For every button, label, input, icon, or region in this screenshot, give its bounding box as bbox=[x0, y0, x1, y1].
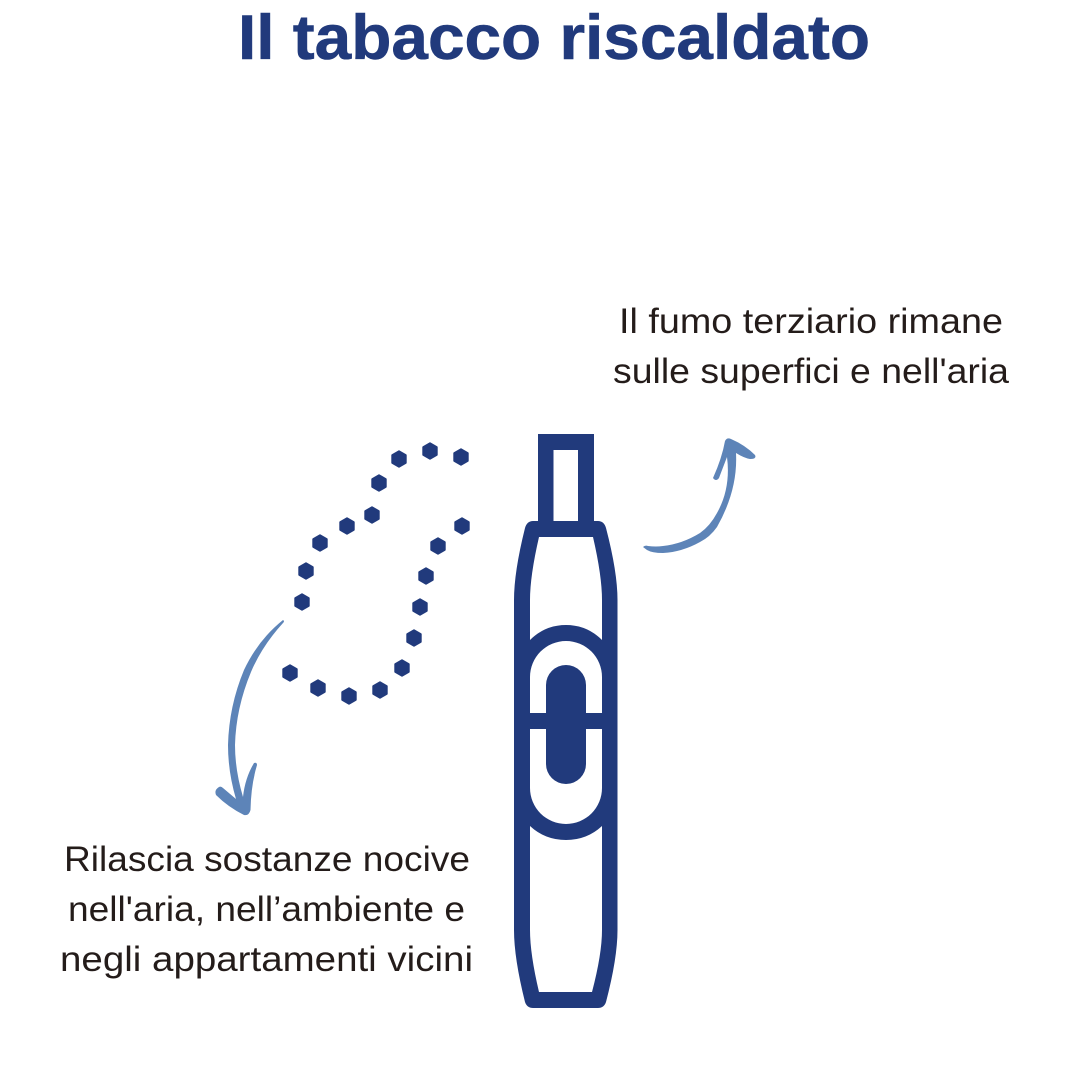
text block: harmful substances: negli appartamenti vicini bbox=[60, 940, 473, 979]
text block: third-hand smoke: sulle superfici e nell'aria bbox=[613, 352, 1010, 391]
text block: harmful substances: Rilascia sostanze nocive bbox=[64, 840, 470, 879]
text block: harmful substances bbox=[60, 840, 473, 979]
text block: third-hand smoke: Il fumo terziario rimane bbox=[619, 302, 1003, 341]
title: Il tabacco riscaldato bbox=[238, 3, 870, 73]
arrow: down to the left bbox=[215, 620, 284, 815]
text block: third-hand smoke bbox=[613, 302, 1010, 391]
dotted smoke trail bbox=[284, 444, 468, 704]
icon: heated tobacco device bbox=[514, 434, 618, 1008]
text block: harmful substances: nell'aria, nell’ambiente e bbox=[68, 890, 465, 929]
arrow: up to the right bbox=[643, 438, 755, 553]
